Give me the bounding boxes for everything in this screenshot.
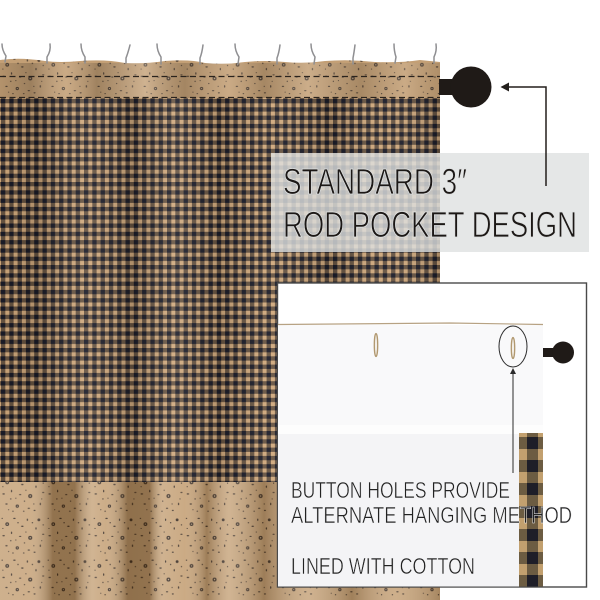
icon: highlight oval xyxy=(499,326,527,367)
curtain: rod pocket header band xyxy=(0,59,440,98)
icon: button holes xyxy=(374,334,515,358)
icon: curtain rod end xyxy=(439,66,492,108)
arrow: to rod end xyxy=(500,82,546,186)
inset text: button holes line 1: BUTTON HOLES PROVIDE xyxy=(291,477,510,503)
lining fabric upper xyxy=(278,323,543,434)
curtain: gingham panel xyxy=(0,96,440,482)
lining fabric lower xyxy=(278,434,519,586)
heading line 1: STANDARD 3″ xyxy=(283,161,467,202)
curtain: floral bottom ruffle xyxy=(0,482,440,600)
inset panel: curtain back xyxy=(278,283,586,587)
inset text: lined with cotton: LINED WITH COTTON xyxy=(291,553,475,579)
gingham edge xyxy=(519,433,543,586)
caption band: rod pocket xyxy=(271,153,589,252)
curtain xyxy=(0,59,440,600)
arrow: to button hole xyxy=(510,368,516,473)
icon: curtain hooks xyxy=(2,44,436,64)
icon: inset rod end xyxy=(543,342,574,364)
